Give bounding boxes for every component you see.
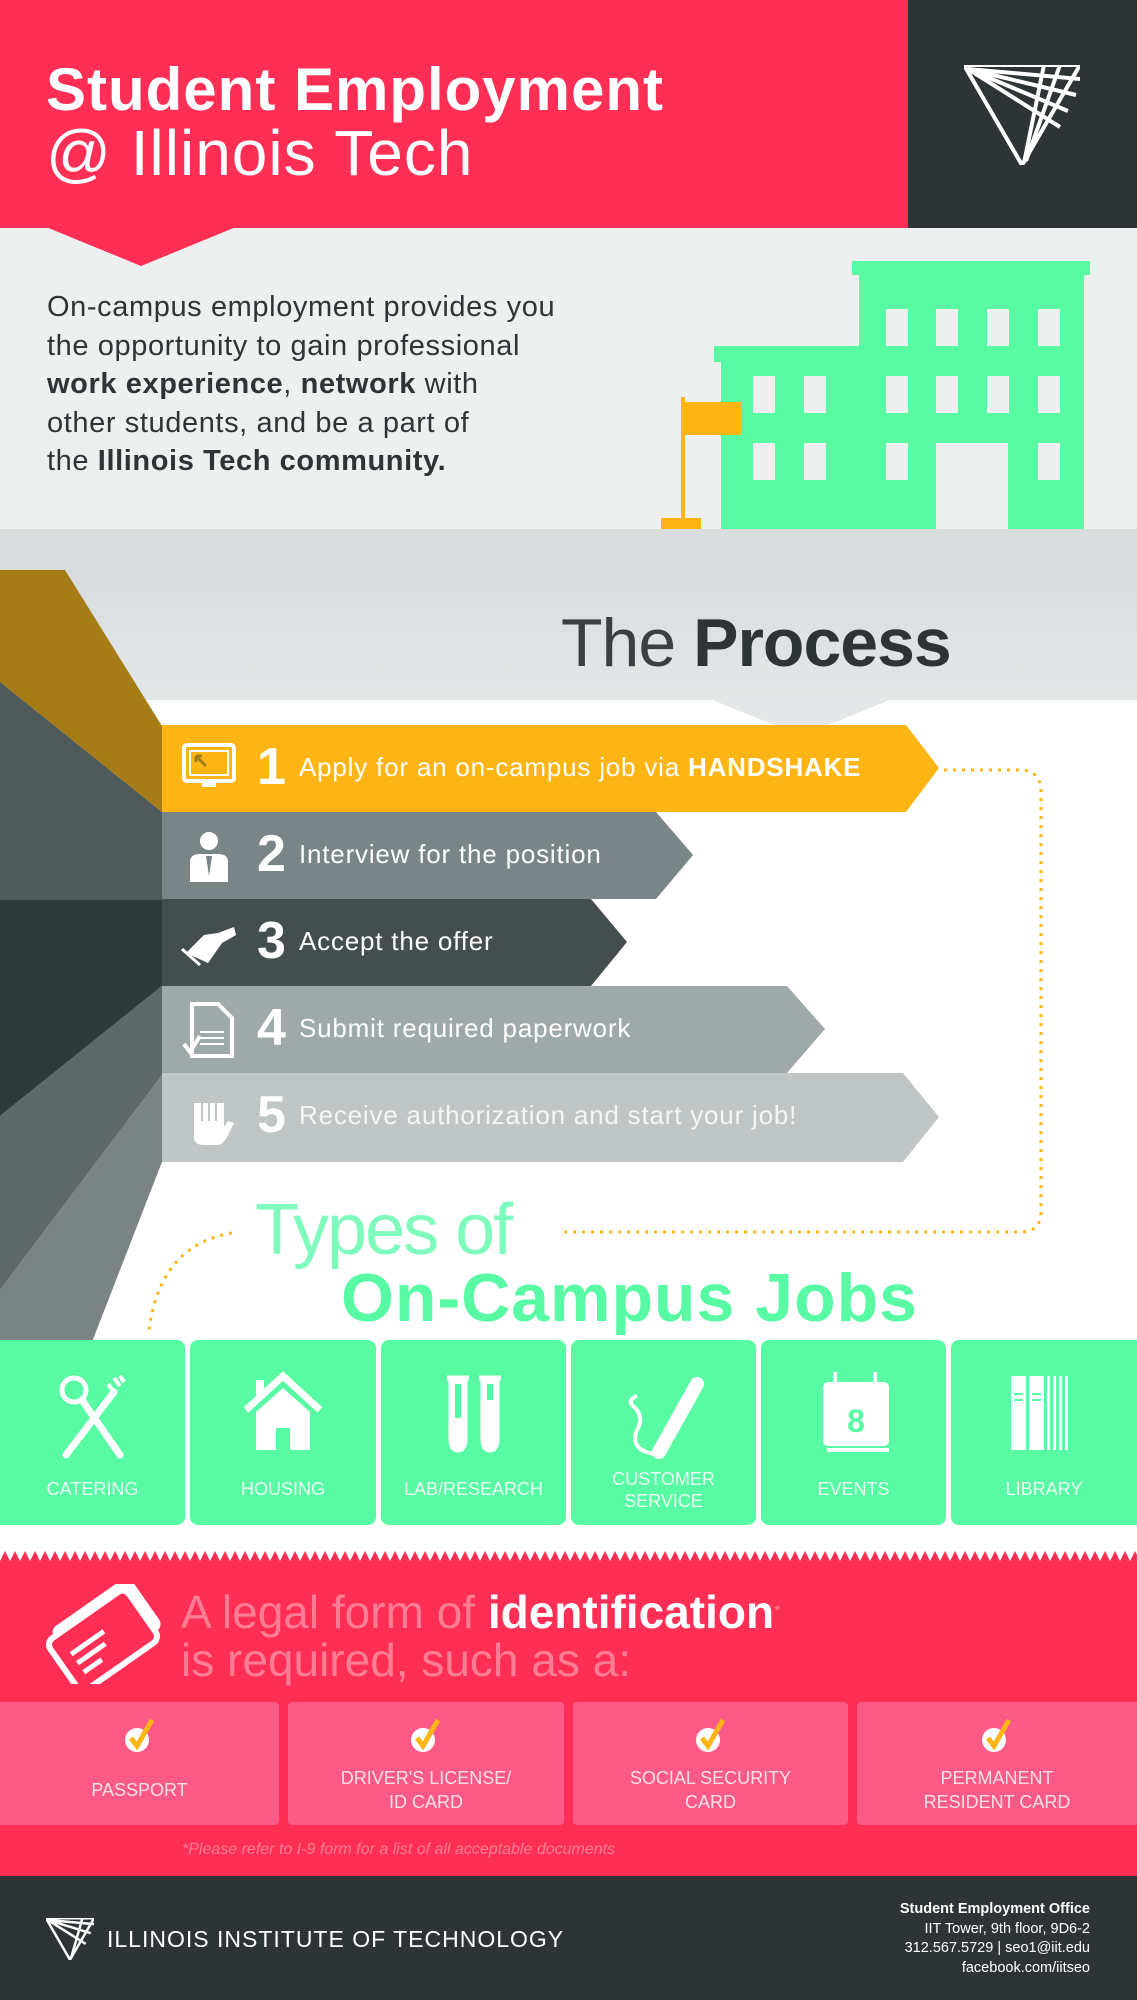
- step 1: Apply for an on-campus job via HANDSHAKE: [299, 752, 861, 782]
- job tile: housing: HOUSING: [241, 1479, 325, 1499]
- footer contact: [900, 1901, 1090, 1976]
- dotted connector arrow: [148, 768, 1042, 1330]
- ID heading: [181, 1586, 780, 1686]
- footer contact: 312.567.5729 | seo1@iit.edu: [905, 1940, 1090, 1956]
- step 1: 1: [257, 738, 286, 796]
- step 5: 5: [257, 1086, 286, 1144]
- job tile: lab/research: [381, 1340, 566, 1525]
- step 2: 2: [257, 825, 286, 883]
- ID card: driver's license: ID CARD: [389, 1792, 463, 1812]
- footer contact: facebook.com/iitseo: [962, 1960, 1090, 1976]
- job tile: library: [951, 1340, 1137, 1525]
- job tile: events: EVENTS: [817, 1479, 890, 1499]
- footer: [0, 1876, 1137, 2000]
- step 1: [162, 725, 939, 812]
- icon: computer: [182, 743, 236, 787]
- intro paragraph: other students, and be a part of: [47, 406, 469, 438]
- step 4: [162, 986, 825, 1073]
- intro paragraph: On-campus employment provides you: [47, 291, 555, 323]
- ID card: social security: [573, 1702, 848, 1825]
- icon: ID cards: [46, 1584, 161, 1684]
- step 2: [162, 812, 693, 899]
- step 5: [162, 1073, 939, 1162]
- footer contact: Student Employment Office: [900, 1901, 1090, 1917]
- icon: paperwork: [182, 1002, 234, 1058]
- ID card: driver's license: [288, 1702, 564, 1825]
- ID card: driver's license: DRIVER'S LICENSE/: [341, 1768, 511, 1788]
- ID card: permanent resident: PERMANENT: [940, 1768, 1054, 1788]
- ID section red background with zigzag: [0, 1551, 1137, 1876]
- left fan decoration: [0, 570, 162, 1340]
- step 3: Accept the offer: [299, 926, 493, 956]
- step 2: Interview for the position: [299, 839, 602, 869]
- ID card: social security: CARD: [685, 1792, 736, 1812]
- header: red title band: [0, 0, 908, 228]
- intro paragraph: [46, 291, 555, 477]
- footnote: *Please refer to I-9 form for a list of all acceptable documents: [182, 1841, 615, 1858]
- footer contact: IIT Tower, 9th floor, 9D6-2: [924, 1920, 1090, 1936]
- step 3: [162, 899, 627, 986]
- process section background: [0, 570, 1137, 700]
- job tile: lab/research: LAB/RESEARCH: [404, 1479, 543, 1499]
- ID card: passport: [0, 1702, 279, 1825]
- ID card: passport: PASSPORT: [91, 1780, 188, 1800]
- icon: hand: [194, 1103, 234, 1145]
- step 3: 3: [257, 912, 286, 970]
- intro panel: [0, 228, 1137, 530]
- job tile: catering: [0, 1340, 185, 1525]
- title: Student Employment: [46, 56, 664, 123]
- job tile: customer service: CUSTOMER: [612, 1469, 715, 1489]
- job tile: housing: [190, 1340, 376, 1525]
- job tile: customer service: [571, 1340, 756, 1525]
- heading: Types of On-Campus Jobs: [255, 1190, 918, 1336]
- step 4: Submit required paperwork: [299, 1013, 631, 1043]
- step 4: 4: [257, 999, 286, 1057]
- heading: Types of On-Campus Jobs: On-Campus Jobs: [341, 1260, 918, 1336]
- ID card: social security: SOCIAL SECURITY: [630, 1768, 791, 1788]
- intro paragraph: the opportunity to gain professional: [47, 330, 520, 362]
- job tile: events: 8: [847, 1403, 864, 1439]
- header arrow pointer: [48, 228, 234, 266]
- intro paragraph: the Illinois Tech community.: [47, 445, 446, 477]
- icon: handshake: [181, 927, 236, 966]
- icon: footer logo: [46, 1918, 94, 1960]
- title: [46, 56, 664, 189]
- ID card: permanent resident: [857, 1702, 1137, 1825]
- icon: IIT logo: [964, 65, 1080, 165]
- job tile: customer service: SERVICE: [624, 1491, 703, 1511]
- icon: interviewer: [190, 832, 228, 882]
- intro paragraph: work experience, network with: [47, 368, 479, 400]
- header: dark logo box: [908, 0, 1137, 228]
- footer institution name: ILLINOIS INSTITUTE OF TECHNOLOGY: [107, 1926, 564, 1952]
- icon: building with flag: [661, 261, 1090, 529]
- job tile: library: LIBRARY: [1006, 1479, 1082, 1499]
- job tile: catering: CATERING: [47, 1479, 138, 1499]
- process heading arrow: [713, 700, 890, 725]
- step 5: Receive authorization and start your job!: [299, 1100, 797, 1130]
- ID card: permanent resident: RESIDENT CARD: [924, 1792, 1070, 1812]
- ID heading: A legal form of identification*: [181, 1586, 780, 1638]
- title: @ Illinois Tech: [46, 117, 473, 189]
- heading: Types of On-Campus Jobs: Types of: [255, 1190, 511, 1270]
- job tile: events: [761, 1340, 946, 1525]
- ID heading: is required, such as a:: [181, 1634, 631, 1686]
- divider band: [0, 529, 1137, 570]
- heading: The Process: The Process: [561, 605, 951, 681]
